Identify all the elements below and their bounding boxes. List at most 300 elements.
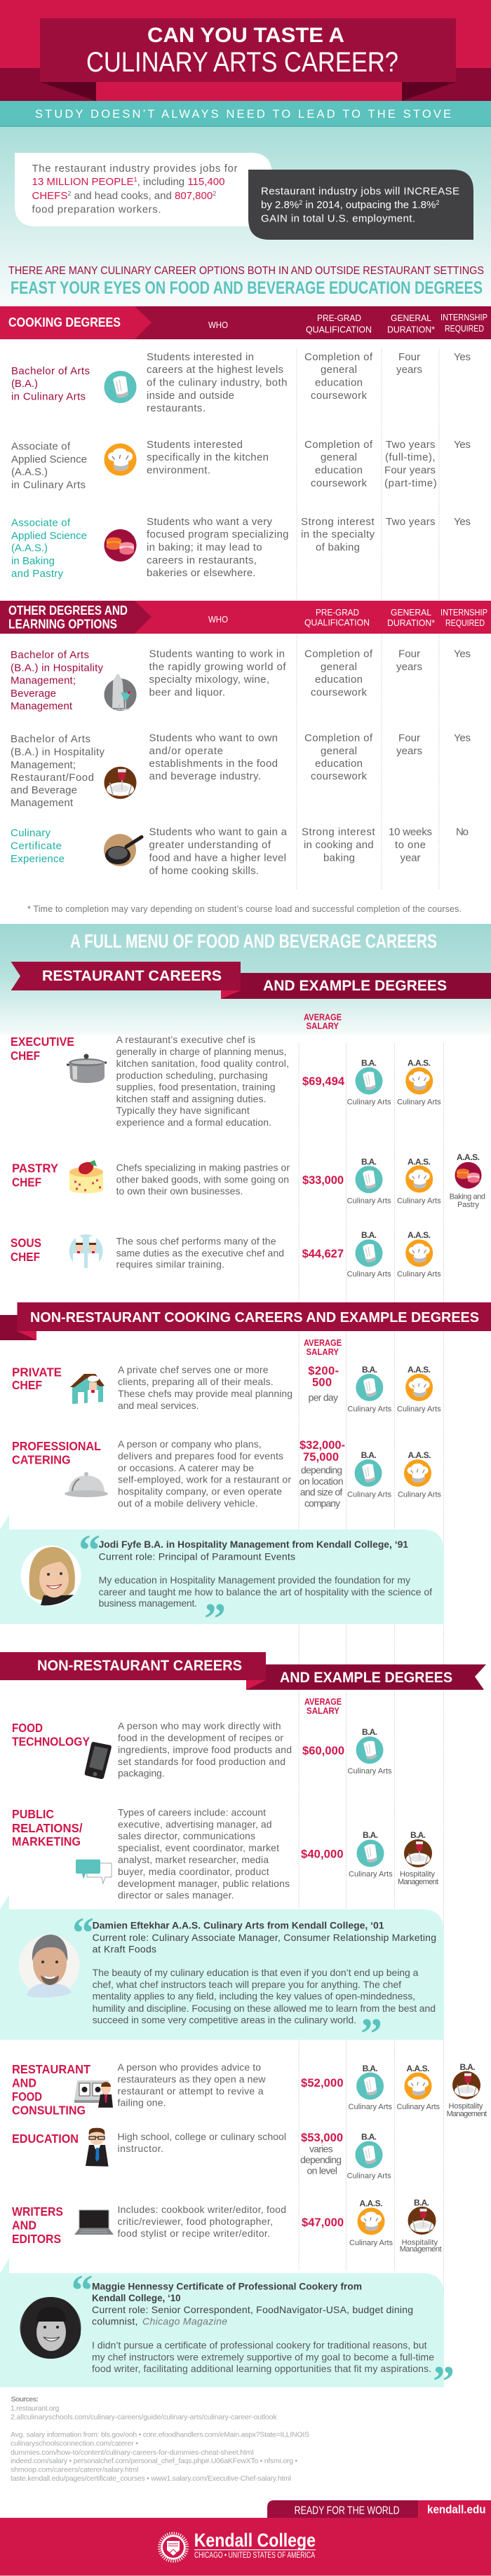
career: public relations / marketing	[12, 1807, 438, 1901]
row: A.A.S. Culinary Arts: (A.A.S.)	[11, 466, 48, 478]
career: sous chef: SOUS	[11, 1236, 41, 1250]
description: critic/reviewer, food photographer,	[118, 2216, 273, 2227]
description: restaurant or attempt to revive a	[118, 2085, 264, 2097]
career: writers and editors: WRITERS	[12, 2204, 63, 2219]
degree: A.A.S. Baking and Pastry: Baking and	[450, 1193, 485, 1201]
degree: A.A.S. Culinary Arts: A.A.S.	[408, 1157, 431, 1167]
description	[118, 2131, 286, 2154]
testimonial: Jodi Fyfe	[0, 1515, 444, 1643]
degree: B.A. Hospitality Management	[447, 2062, 487, 2118]
career: education	[12, 2128, 391, 2181]
degree: A.A.S. Culinary Arts	[349, 2199, 393, 2247]
degree: A.A.S. Baking and Pastry: A.A.S.	[457, 1152, 480, 1162]
quote text: business management.	[99, 1597, 197, 1609]
sources	[11, 2395, 309, 2483]
footnote: * Time to completion may vary depending on student’s course load and successful completion of the courses.	[27, 904, 462, 914]
who: of the culinary industry, both	[147, 377, 288, 389]
average salary label	[304, 1697, 342, 1716]
career: public relations / marketing: RELATIONS/	[12, 1821, 83, 1835]
description: set standards for food production and	[118, 1756, 285, 1767]
description: packaging.	[118, 1768, 165, 1779]
testimonial: Maggie Hennessy	[0, 2258, 455, 2406]
qualification: of baking	[316, 542, 360, 554]
row: B.A. Beverage Management: Management	[11, 700, 73, 712]
degree: A.A.S. Baking and Pastry	[450, 1152, 485, 1209]
attribution: Damien Eftekhar A.A.S. Culinary Arts from Kendall College, ‘01	[93, 1920, 384, 1931]
attribution: columnist,	[92, 2316, 137, 2327]
ribbon: non-restaurant careers	[0, 1652, 486, 1690]
row: B.A. Restaurant/Food and Beverage Management: Bachelor of Arts	[11, 733, 90, 745]
who	[147, 439, 269, 477]
degree: A.A.S. Culinary Arts: Culinary Arts	[398, 1491, 442, 1499]
salary: 500	[312, 1377, 332, 1389]
degree: A.A.S. Culinary Arts: Culinary Arts	[397, 1270, 441, 1279]
icon: house	[70, 1374, 105, 1404]
career: writers and editors	[12, 2198, 442, 2254]
who: Students who want a very	[147, 516, 272, 528]
degree: A.A.S. Culinary Arts	[397, 1365, 441, 1413]
qualification: Completion of	[304, 351, 373, 363]
average salary label: SALARY	[307, 1706, 340, 1716]
qualification: coursework	[311, 687, 368, 699]
row: B.A. Restaurant/Food and Beverage Management: (B.A.) in Hospitality	[11, 747, 105, 758]
icon: speech bubbles	[76, 1860, 112, 1883]
quote text: food writer, facilitating additional learning opportunities that fit my aspirations.	[92, 2363, 431, 2374]
duration: Two years	[386, 516, 435, 528]
career: sous chef	[11, 1230, 441, 1279]
career: private chef: CHEF	[12, 1378, 42, 1392]
attribution: Current role: Principal of Paramount Events	[99, 1551, 295, 1562]
career: restaurant and food consulting: CONSULTING	[12, 2104, 86, 2118]
description	[118, 1720, 292, 1779]
career: executive chef: EXECUTIVE	[11, 1035, 74, 1049]
row: A.A.S. Culinary Arts: Applied Science	[11, 454, 87, 465]
career: food technology: TECHNOLOGY	[12, 1735, 90, 1749]
who: specifically in the kitchen	[147, 451, 269, 463]
salary: varies	[309, 2144, 333, 2155]
description: self-employed, work for a restaurant or	[118, 1474, 291, 1485]
qualification	[302, 826, 375, 864]
degree: A.A.S. Culinary Arts: Culinary Arts	[397, 2103, 440, 2111]
row: B.A. Beverage Management: Beverage	[11, 688, 56, 700]
duration: 10 weeks	[389, 826, 432, 838]
qualification: education	[315, 674, 363, 686]
ribbon: non-restaurant cooking careers: NON-RESTAURANT COOKING CAREERS AND EXAMPLE DEGREES	[30, 1310, 479, 1326]
qualification: in the specialty	[301, 529, 375, 540]
degree: A.A.S. Culinary Arts: Culinary Arts	[397, 1098, 441, 1107]
degree: B.A. Culinary Arts: Culinary Arts	[348, 1767, 392, 1776]
degree: A.A.S. Culinary Arts	[397, 1230, 441, 1279]
quote mark open: “	[79, 1527, 100, 1574]
career: professional catering	[12, 1438, 442, 1509]
section heading: education degrees	[8, 265, 484, 298]
table header: cooking degrees: QUALIFICATION	[306, 325, 372, 335]
career: restaurant and food consulting	[12, 2062, 487, 2118]
attribution: Kendall College, ‘10	[92, 2292, 181, 2303]
degree: B.A. Culinary Arts: Culinary Arts	[347, 1405, 392, 1413]
degree: B.A. Culinary Arts	[347, 1365, 392, 1413]
degree: B.A. Culinary Arts	[349, 1830, 393, 1879]
duration	[396, 732, 422, 757]
salary: $200-	[308, 1365, 339, 1377]
qualification	[304, 648, 373, 699]
quote text: my chef instructors were extremely supportive of my goal to become a full-time	[92, 2352, 434, 2363]
description: The sous chef performs many of the	[116, 1236, 276, 1247]
degree: B.A. Culinary Arts: B.A.	[362, 1727, 377, 1737]
row: Culinary Certificate Experience: Experience	[11, 853, 65, 865]
attribution: Current role: Senior Correspondent, FoodNavigator-USA, budget dining	[92, 2304, 413, 2315]
qualification: Strong interest	[301, 516, 375, 528]
who: Students who want to own	[149, 732, 278, 744]
who: Students who want to gain a	[149, 826, 288, 838]
salary	[300, 2132, 343, 2176]
who	[149, 826, 288, 877]
internship: Yes	[454, 732, 471, 744]
row: A.A.S. Baking and Pastry: (A.A.S.)	[11, 543, 48, 554]
duration: Four years	[384, 465, 436, 477]
qualification: general	[321, 364, 357, 376]
quote text	[99, 1574, 432, 1609]
quote text: My education in Hospitality Management provided the foundation for my	[99, 1574, 410, 1586]
degree: A.A.S. Baking and Pastry: Pastry	[457, 1201, 480, 1209]
who: Students interested	[147, 439, 243, 451]
sources: 1.restaurant.org	[11, 2404, 60, 2413]
career: pastry chef: PASTRY	[12, 1161, 58, 1175]
degree: B.A. Hospitality Management: B.A.	[460, 2062, 476, 2072]
row: B.A. Restaurant/Food and Beverage Management	[11, 732, 471, 809]
career: sous chef: CHEF	[11, 1250, 40, 1264]
careers gradient background	[0, 924, 491, 1035]
career: pastry chef	[12, 1152, 485, 1209]
degree: B.A. Culinary Arts: Culinary Arts	[348, 2103, 393, 2111]
career: private chef: PRIVATE	[12, 1365, 62, 1379]
row: B.A. Restaurant/Food and Beverage Management: Management	[11, 797, 74, 809]
table header: cooking degrees: COOKING DEGREES	[8, 315, 121, 329]
teal subtitle band: STUDY DOESN’T ALWAYS NEED TO LEAD TO THE STOVE	[35, 108, 451, 121]
attribution: at Kraft Foods	[93, 1944, 156, 1955]
quote text: I didn’t pursue a certificate of professional cookery for traditional reasons, but	[92, 2340, 427, 2351]
description	[116, 1034, 289, 1128]
sources: 2.allculinaryschools.com/culinary-careers/guide/culinary-arts/culinary-career-outlook	[11, 2413, 277, 2422]
callout: restaurant industry jobs: 13 MILLION PEOPLE	[32, 176, 134, 188]
row: Culinary Certificate Experience: Certificate	[11, 840, 62, 852]
callout: restaurant industry jobs: 807,800	[175, 190, 213, 202]
footer tab: tagline and url: kendall.edu	[427, 2503, 485, 2516]
average salary label	[304, 1338, 342, 1357]
attribution: Chicago Magazine	[142, 2316, 227, 2327]
attribution: Maggie Hennessy Certificate of Professional Cookery from	[92, 2281, 362, 2292]
salary: on location	[299, 1476, 344, 1487]
icon: plate and wine	[104, 767, 136, 799]
qualification	[304, 351, 373, 402]
average salary label: AVERAGE	[304, 1013, 342, 1023]
callout: restaurant industry jobs: , including	[137, 176, 187, 188]
degree: B.A. Culinary Arts: Culinary Arts	[347, 1197, 391, 1206]
icon: stock pot	[67, 1054, 107, 1083]
description: food stylist or recipe writer/editor.	[118, 2228, 270, 2239]
table header: other degrees: DURATION*	[387, 618, 435, 628]
description: production scheduling, purchasing	[116, 1070, 268, 1081]
row: B.A. Culinary Arts: (B.A.)	[11, 378, 38, 390]
icon: teacher	[86, 2128, 108, 2167]
career: professional catering: CATERING	[12, 1453, 71, 1467]
description: Typically they have significant	[116, 1105, 250, 1116]
who	[149, 648, 286, 699]
hero banner	[0, 0, 491, 101]
qualification	[304, 732, 373, 782]
quote text: career and taught me how to balance the art of hospitality with the science of	[99, 1586, 432, 1597]
description: kitchen sanitation, food quality control,	[116, 1058, 289, 1069]
duration: Four	[398, 732, 420, 744]
row: A.A.S. Baking and Pastry	[11, 516, 471, 580]
icon: shaker and cocktail	[104, 674, 136, 711]
description: sales director, communications	[118, 1830, 255, 1841]
average salary label: AVERAGE	[304, 1697, 342, 1707]
degree: A.A.S. Culinary Arts	[397, 1157, 441, 1206]
icon: macarons	[104, 529, 136, 561]
description: director or sales manager.	[118, 1890, 234, 1901]
quote mark close: ”	[204, 1595, 226, 1643]
description: executive, advertising manager, ad	[118, 1819, 272, 1830]
row: A.A.S. Baking and Pastry: in Baking	[11, 555, 55, 567]
who: the rapidly growing world of	[149, 661, 286, 673]
teal subtitle band	[0, 101, 491, 127]
table header: cooking degrees	[0, 306, 491, 339]
table header: other degrees: QUALIFICATION	[304, 618, 370, 628]
salary: $53,000	[301, 2132, 343, 2144]
degree: B.A. Culinary Arts: B.A.	[361, 1230, 377, 1240]
quote mark open: “	[72, 1909, 94, 1957]
career: restaurant and food consulting: FOOD	[12, 2090, 42, 2104]
footer tab: tagline and url: READY FOR THE WORLD	[295, 2505, 400, 2517]
degree: B.A. Culinary Arts: Culinary Arts	[347, 1491, 391, 1499]
description	[118, 1438, 291, 1509]
row: B.A. Restaurant/Food and Beverage Management: and Beverage	[11, 784, 77, 796]
description: Types of careers include: account	[118, 1807, 266, 1818]
who: bakeries or elsewhere.	[147, 567, 256, 579]
description	[118, 2204, 286, 2239]
description: restaurateurs as they open a new	[118, 2073, 266, 2085]
ribbon: non-restaurant careers: NON-RESTAURANT CAREERS	[37, 1658, 242, 1674]
attribution	[92, 2281, 413, 2327]
salary: $32,000-	[300, 1439, 345, 1452]
description: failing one.	[118, 2097, 166, 2108]
duration: Four	[398, 648, 420, 660]
table header: other degrees: PRE-GRAD	[316, 607, 359, 618]
attribution: Jodi Fyfe B.A. in Hospitality Management from Kendall College, ‘91	[99, 1539, 408, 1550]
description: requires similar training.	[116, 1259, 224, 1270]
description	[116, 1236, 284, 1270]
description: ingredients, improve food products and	[118, 1744, 292, 1755]
qualification: Completion of	[304, 439, 373, 451]
icon: stove and consultant	[74, 2080, 113, 2108]
degree: A.A.S. Culinary Arts: A.A.S.	[408, 1230, 431, 1240]
who: environment.	[147, 465, 210, 477]
row: A.A.S. Baking and Pastry: Applied Science	[11, 530, 87, 542]
row: A.A.S. Baking and Pastry: and Pastry	[11, 568, 63, 580]
degree: B.A. Culinary Arts: B.A.	[363, 2064, 378, 2073]
degree: B.A. Hospitality Management: B.A.	[410, 1830, 426, 1840]
salary: company	[304, 1498, 340, 1509]
duration: Two years	[386, 439, 435, 451]
icon: strawberry cake	[69, 1160, 103, 1193]
description: generally in charge of planning menus,	[116, 1046, 286, 1057]
portrait: Damien Eftekhar	[18, 1935, 80, 1998]
degree: B.A. Culinary Arts	[347, 1157, 391, 1206]
ribbon: non-restaurant careers: AND EXAMPLE DEGREES	[280, 1670, 452, 1686]
callout: restaurant industry jobs	[15, 153, 272, 226]
career: education: EDUCATION	[12, 2132, 79, 2146]
degree: A.A.S. Culinary Arts: A.A.S.	[407, 2064, 429, 2073]
degree: B.A. Culinary Arts: Culinary Arts	[347, 1098, 391, 1107]
description: and meal services.	[118, 1400, 199, 1411]
salary: $60,000	[302, 1745, 344, 1757]
description: or occasions. A caterer may be	[118, 1462, 254, 1473]
duration: years	[396, 364, 422, 376]
description: A private chef serves one or more	[118, 1364, 269, 1375]
row: B.A. Restaurant/Food and Beverage Management: Management;	[11, 759, 76, 771]
career: food technology: FOOD	[12, 1721, 43, 1735]
career: professional catering: PROFESSIONAL	[12, 1439, 101, 1453]
row: A.A.S. Culinary Arts: in Culinary Arts	[11, 479, 86, 491]
sources: Sources:	[11, 2395, 39, 2404]
who: and beverage industry.	[149, 770, 261, 782]
who: beer and liquor.	[149, 687, 225, 699]
degree: B.A. Hospitality Management: Hospitality	[449, 2102, 483, 2111]
degree: B.A. Hospitality Management: Management	[447, 2110, 487, 2118]
ribbon: restaurant careers: AND EXAMPLE DEGREES	[263, 978, 447, 994]
average salary label: SALARY	[306, 1021, 339, 1031]
ribbon: restaurant careers	[11, 962, 491, 999]
icon: two chefs	[69, 1234, 103, 1268]
portrait: Jodi Fyfe	[21, 1546, 81, 1606]
who: Students wanting to work in	[149, 648, 285, 660]
ribbon: non-restaurant cooking careers	[0, 1302, 491, 1340]
qualification: coursework	[311, 390, 368, 402]
portrait: Maggie Hennessy	[20, 2297, 81, 2359]
qualification: education	[315, 465, 363, 477]
sources: taste.kendall.edu/pages/certificate_courses • www1.salary.com/Executive-Chef-salary.html	[11, 2474, 291, 2483]
quote mark open: “	[72, 2267, 93, 2315]
sources: culinaryschoolsconnection.com/caterer •	[11, 2439, 138, 2448]
qualification: coursework	[311, 770, 368, 782]
career: pastry chef: CHEF	[12, 1175, 41, 1190]
degree: B.A. Hospitality Management: Management	[398, 1878, 438, 1886]
row: A.A.S. Culinary Arts	[11, 439, 471, 491]
who: of home cooking skills.	[149, 865, 259, 877]
degree: B.A. Culinary Arts: B.A.	[362, 1365, 377, 1375]
description: out of a mobile delivery vehicle.	[118, 1498, 258, 1509]
row: A.A.S. Baking and Pastry: Associate of	[11, 517, 71, 529]
qualification: education	[315, 758, 363, 770]
qualification: baking	[323, 852, 355, 864]
duration: years	[396, 661, 422, 673]
who: restaurants.	[147, 402, 206, 414]
salary: on level	[307, 2165, 337, 2176]
description: A restaurant’s executive chef is	[116, 1034, 255, 1045]
icon: chef hat	[104, 444, 136, 476]
description	[118, 1807, 290, 1901]
degree: B.A. Culinary Arts: Culinary Arts	[349, 1870, 393, 1879]
qualification: Completion of	[304, 648, 373, 660]
qualification: in cooking and	[304, 839, 374, 851]
row: B.A. Beverage Management: (B.A.) in Hospitality	[11, 662, 104, 674]
quote text: chef, what chef instructors teach will prepare you for anything. The chef	[93, 1979, 401, 1990]
qualification: Completion of	[304, 732, 373, 744]
degree: B.A. Culinary Arts: B.A.	[363, 1830, 378, 1840]
description: A person who provides advice to	[118, 2062, 261, 2073]
ribbon: restaurant careers: RESTAURANT CAREERS	[42, 968, 222, 984]
average salary label: AVERAGE	[304, 1338, 342, 1348]
salary: $69,494	[302, 1075, 345, 1088]
testimonial: Damien Eftekhar	[0, 1895, 444, 2058]
internship: Yes	[454, 516, 471, 528]
attribution: Current role: Culinary Associate Manager, Consumer Relationship Marketing	[93, 1932, 436, 1943]
salary: 75,000	[303, 1451, 339, 1464]
duration	[396, 351, 422, 376]
salary	[299, 1439, 345, 1509]
salary: per day	[309, 1392, 338, 1403]
description: analyst, market researcher, media	[118, 1854, 269, 1865]
who: inside and outside	[147, 390, 234, 402]
who: and/or operate	[149, 745, 223, 757]
description: food in the development of recipes or	[118, 1732, 283, 1743]
duration: years	[396, 745, 422, 757]
icon: toque	[104, 371, 136, 403]
who: specialty mixology, wine,	[149, 674, 269, 686]
degree: A.A.S. Culinary Arts: A.A.S.	[408, 1365, 431, 1375]
salary: $47,000	[302, 2216, 344, 2229]
icon: laptop	[74, 2210, 114, 2235]
attribution	[99, 1539, 408, 1562]
degree: A.A.S. Culinary Arts: A.A.S.	[408, 1450, 431, 1460]
quote mark close: ”	[361, 2010, 382, 2058]
row: B.A. Beverage Management: Management;	[11, 675, 76, 687]
degree: A.A.S. Culinary Arts: Culinary Arts	[349, 2239, 393, 2247]
who: Students interested in	[147, 351, 254, 363]
career: restaurant and food consulting: AND	[12, 2076, 36, 2090]
career: restaurant and food consulting: RESTAURANT	[12, 2062, 90, 2076]
degree: A.A.S. Culinary Arts: Culinary Arts	[397, 1197, 441, 1206]
degree: B.A. Hospitality Management: Management	[400, 2245, 442, 2254]
degree: B.A. Hospitality Management: B.A.	[414, 2198, 429, 2208]
callout: job growth: 2	[299, 199, 302, 206]
career: executive chef: CHEF	[11, 1049, 40, 1063]
description: development manager, public relations	[118, 1878, 290, 1889]
icon: cloche	[65, 1472, 108, 1497]
description: clients, preparing all of their meals.	[118, 1376, 274, 1387]
callout: restaurant industry jobs: food preparation workers.	[32, 204, 161, 216]
title line 2: CULINARY ARTS CAREER?	[86, 47, 398, 78]
table header: cooking degrees: GENERAL	[391, 313, 431, 323]
degree: B.A. Hospitality Management: Hospitality	[400, 1870, 435, 1879]
qualification: general	[321, 745, 357, 757]
salary: and size of	[300, 1487, 342, 1498]
footer tab: tagline and url	[267, 2500, 491, 2518]
callout: restaurant industry jobs: 1	[134, 176, 137, 183]
row: B.A. Culinary Arts	[11, 351, 471, 414]
footer: Kendall College logo: Kendall College	[194, 2530, 316, 2551]
degree: B.A. Hospitality Management	[398, 1830, 438, 1886]
description: kitchen staff and assigning duties.	[116, 1093, 267, 1105]
duration	[389, 826, 432, 864]
description: These chefs may provide meal planning	[118, 1388, 292, 1399]
footer: Kendall College logo: CHICAGO • UNITED STATES OF AMERICA	[194, 2551, 315, 2560]
degree: A.A.S. Culinary Arts	[398, 1450, 442, 1499]
quote text	[92, 2340, 434, 2374]
qualification: general	[321, 661, 357, 673]
who: food and have a higher level	[149, 852, 286, 864]
